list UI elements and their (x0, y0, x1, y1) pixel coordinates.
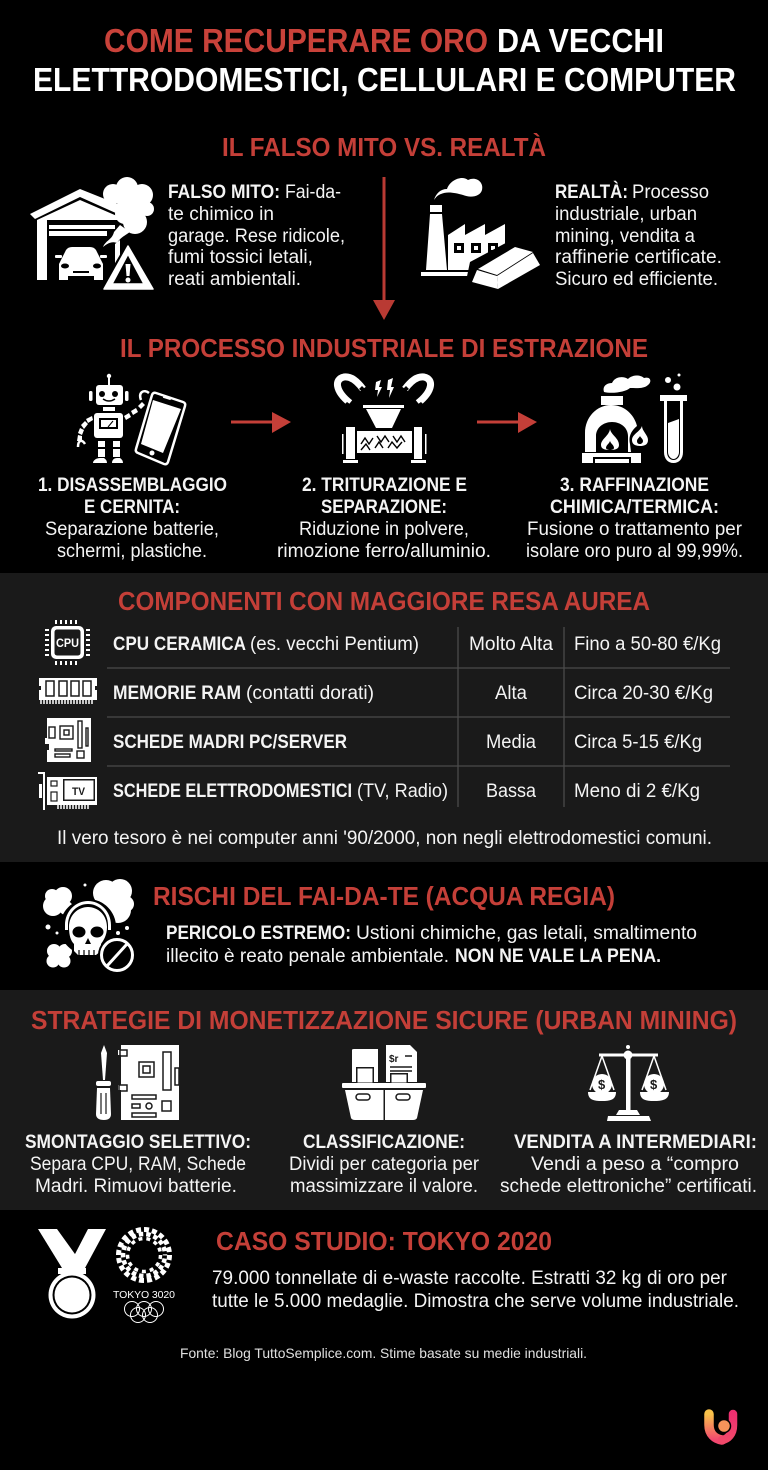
row 2 yield: Alta (495, 683, 527, 704)
row 3 yield: Media (486, 732, 536, 753)
text: falso mito (168, 182, 345, 290)
text: rischi: Ustioni chimiche, gas letali, smaltimento (356, 923, 697, 944)
strategy 1 text: Separa CPU, RAM, Schede (30, 1154, 246, 1175)
row 4 yield: Bassa (486, 781, 536, 802)
strategy 3 text: VENDITA A INTERMEDIARI: (514, 1132, 757, 1153)
text: realtà: REALTÀ: (555, 181, 628, 203)
heading: caso studio: CASO STUDIO: TOKYO 2020 (216, 1226, 552, 1256)
icon: basket (342, 1045, 426, 1120)
text: rischi: PERICOLO ESTREMO: (166, 923, 351, 944)
row 1 label: CPU CERAMICA (113, 634, 246, 655)
heading: processo industriale: IL PROCESSO INDUSTRIALE DI ESTRAZIONE (120, 333, 648, 363)
strategy 1 text: Madri. Rimuovi batterie. (35, 1176, 237, 1197)
step 3 text: 3. RAFFINAZIONE (560, 475, 709, 496)
strategy 1 text (25, 1132, 251, 1197)
heading: componenti: COMPONENTI CON MAGGIORE RESA AUREA (118, 586, 650, 616)
step 2 text (277, 475, 491, 562)
text: falso mito: garage. Rese ridicole, (168, 226, 345, 247)
step 1 text: schermi, plastiche. (57, 541, 207, 562)
row 1 price: Fino a 50-80 €/Kg (574, 634, 721, 655)
panel: componenti (0, 573, 768, 862)
icon: skull with fumes (43, 879, 136, 974)
icon: robot with smartphone (77, 374, 185, 464)
text: falso mito: te chimico in (168, 204, 274, 225)
text: caso studio: 79.000 tonnellate di e-waste raccolte. Estratti 32 kg di oro per (212, 1268, 728, 1289)
text: caso studio (212, 1268, 739, 1312)
step 1 text (38, 475, 227, 562)
icon: cpu (45, 620, 90, 665)
step 1 text: Separazione batterie, (45, 519, 219, 540)
icon: motherboard (45, 718, 91, 762)
title: DA VECCHI (497, 22, 664, 59)
step 1 text: E CERNITA: (84, 497, 180, 518)
source note: Fonte: Blog TuttoSemplice.com. Stime basate su medie industriali. (180, 1345, 587, 1361)
strategy 3 text (500, 1132, 757, 1197)
heading: rischi: RISCHI DEL FAI-DA-TE (ACQUA REGIA) (153, 881, 615, 911)
strategy 3 text: Vendi a peso a “compro (531, 1154, 739, 1175)
strategy 2 text: CLASSIFICAZIONE: (303, 1132, 465, 1153)
row 2 label: MEMORIE RAM (113, 683, 241, 704)
icon: ram (39, 678, 97, 704)
text: caso studio: tutte le 5.000 medaglie. Dimostra che serve volume industriale. (212, 1291, 739, 1312)
strategy 2 text (289, 1132, 480, 1197)
text: realtà: Processo (632, 182, 709, 203)
strategy 2 text: Dividi per categoria per (289, 1154, 480, 1175)
table note: Il vero tesoro è nei computer anni '90/2000, non negli elettrodomestici comuni. (57, 828, 712, 849)
text: falso mito: FALSO MITO: (168, 182, 280, 203)
text: falso mito: fumi tossici letali, (168, 247, 313, 268)
panel: strategie (0, 990, 768, 1210)
text: realtà: Sicuro ed efficiente. (555, 269, 718, 290)
text: realtà (555, 181, 722, 290)
row 1 yield: Molto Alta (469, 634, 553, 655)
arrow: myth to process (373, 177, 395, 320)
step 2 text: SEPARAZIONE: (321, 497, 447, 518)
icon: tokyo emblem (113, 1230, 175, 1322)
step 1 text: 1. DISASSEMBLAGGIO (38, 475, 227, 496)
heading: strategie: STRATEGIE DI MONETIZZAZIONE SICURE (URBAN MINING) (31, 1005, 737, 1035)
icon: cpu: CPU (56, 636, 79, 650)
text: falso mito: Fai-da- (285, 182, 341, 203)
row 2 label: (contatti dorati) (246, 683, 374, 704)
row 3 price: Circa 5-15 €/Kg (574, 732, 702, 753)
text: rischi: NON NE VALE LA PENA. (455, 946, 661, 967)
row 1 label (113, 634, 419, 655)
icon: garage with smoke and warning (30, 177, 158, 292)
strategy 1 text: SMONTAGGIO SELETTIVO: (25, 1132, 251, 1153)
icon: magnets and shredder (337, 377, 431, 463)
icon: furnace and test tube (582, 374, 687, 463)
text: realtà: industriale, urban (555, 204, 697, 225)
icon: tv board: TV (72, 786, 86, 798)
icon: balance scale: $ (598, 1077, 606, 1092)
step 3 text: CHIMICA/TERMICA: (550, 497, 719, 518)
icon: tv board (38, 772, 97, 810)
heading: falso mito vs realtà: IL FALSO MITO VS. REALTÀ (222, 132, 546, 162)
icon: tokyo emblem: TOKYO 3020 (113, 1289, 175, 1301)
strategy 2 text: massimizzare il valore. (290, 1176, 478, 1197)
step 3 text: Fusione o trattamento per (527, 519, 743, 540)
icon: basket: $r (389, 1054, 399, 1065)
title (33, 22, 736, 98)
arrow: step 2 to step 3 (477, 412, 537, 433)
text: falso mito: reati ambientali. (168, 269, 301, 290)
step 3 text: isolare oro puro al 99,99%. (526, 541, 743, 562)
step 3 text (526, 475, 743, 562)
icon: factory and gold bar (421, 178, 550, 295)
row 3 label: SCHEDE MADRI PC/SERVER (113, 732, 347, 753)
title: COME RECUPERARE ORO (104, 22, 488, 59)
icon: balance scale (588, 1045, 669, 1121)
step 2 text: Riduzione in polvere, (299, 519, 469, 540)
step 2 text: rimozione ferro/alluminio. (277, 541, 491, 562)
row 4 label: (TV, Radio) (357, 781, 448, 802)
row 2 price: Circa 20-30 €/Kg (574, 683, 713, 704)
row 1 label: (es. vecchi Pentium) (250, 634, 419, 655)
text: rischi (166, 923, 697, 967)
icon: medal (38, 1229, 106, 1318)
step 2 text: 2. TRITURAZIONE E (302, 475, 467, 496)
logo (709, 1414, 733, 1440)
arrow: step 1 to step 2 (231, 412, 291, 433)
row 4 price: Meno di 2 €/Kg (574, 781, 700, 802)
text: realtà: raffinerie certificate. (555, 247, 722, 268)
row 2 label (113, 683, 374, 704)
icon: balance scale: $ (650, 1077, 658, 1092)
text: realtà: mining, vendita a (555, 226, 695, 247)
row 4 label: SCHEDE ELETTRODOMESTICI (113, 781, 352, 802)
icon: screwdriver and board (96, 1045, 179, 1120)
strategy 3 text: schede elettroniche” certificati. (500, 1176, 757, 1197)
text: rischi: illecito è reato penale ambientale. (166, 946, 449, 967)
